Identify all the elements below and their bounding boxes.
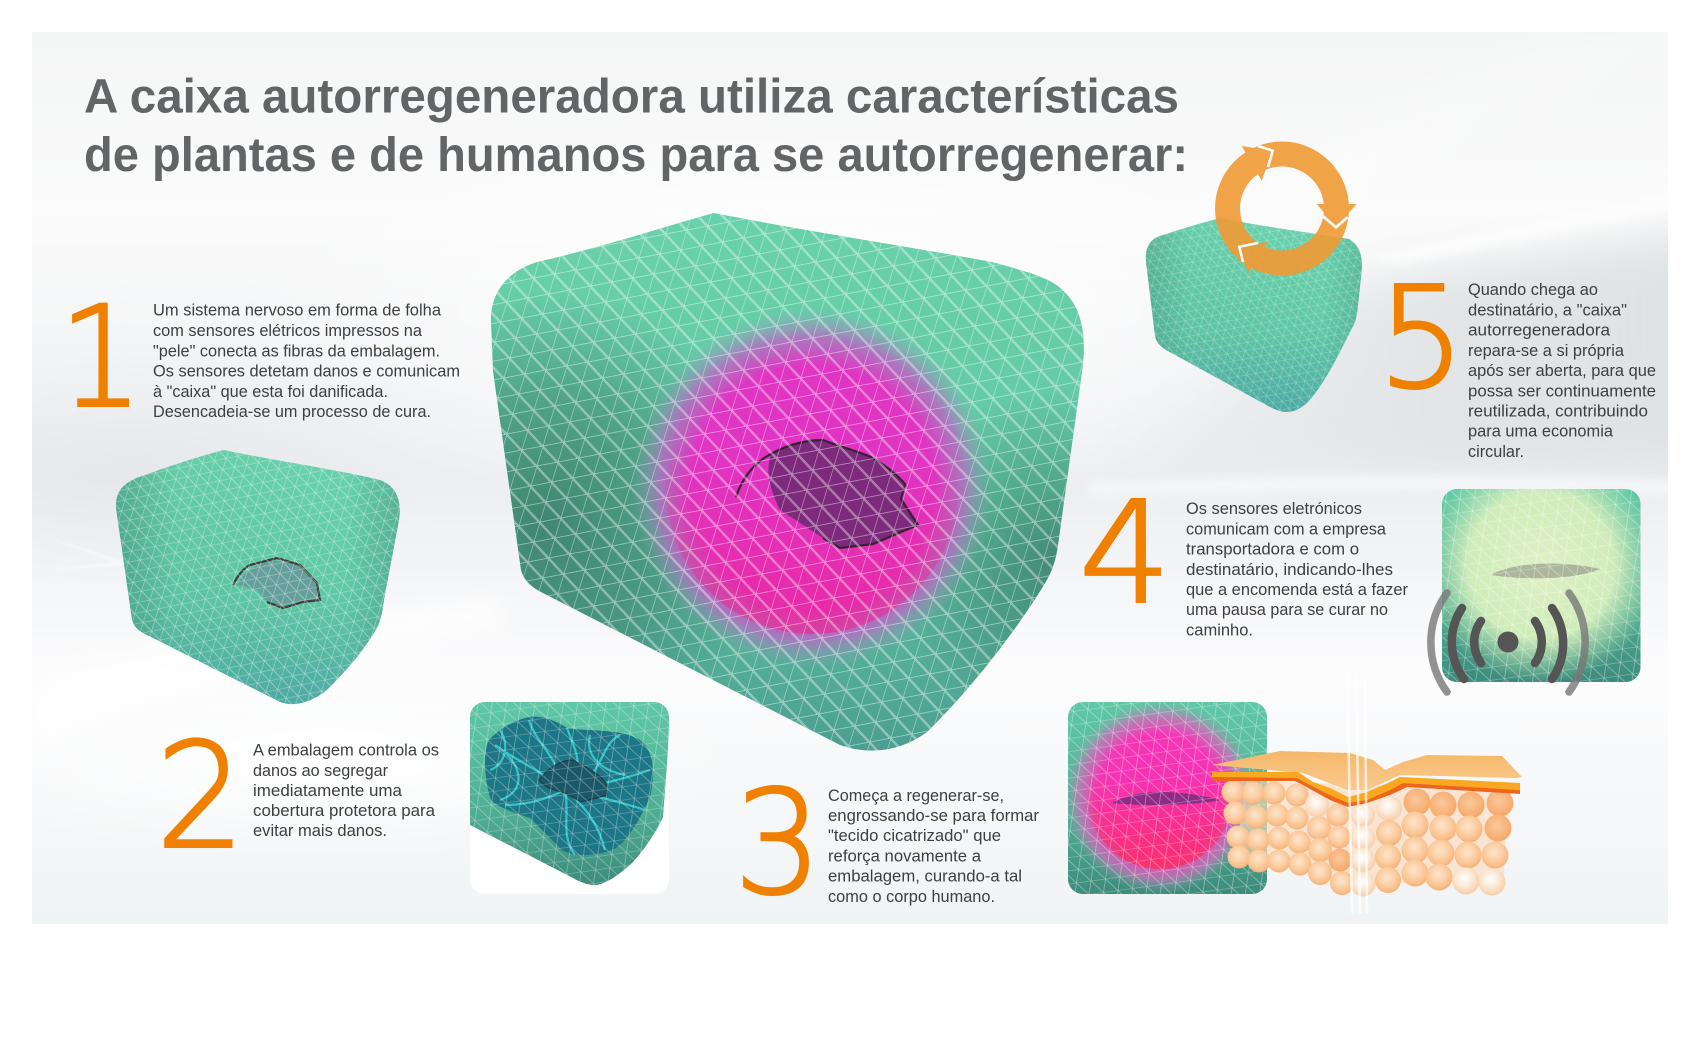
step 3 text: "tecido cicatrizado" que bbox=[828, 826, 1001, 845]
step 1 text bbox=[153, 301, 460, 421]
title bbox=[84, 70, 1188, 182]
step 5 text bbox=[1468, 280, 1656, 461]
step 2 number: 2 bbox=[156, 712, 245, 882]
scar slit bbox=[1112, 792, 1222, 805]
pink healing zone bbox=[632, 308, 992, 668]
step 5 text: circular. bbox=[1468, 442, 1524, 461]
damage hole bbox=[736, 440, 918, 548]
illustration: healed small box bbox=[1140, 215, 1370, 415]
step 2 text: cobertura protetora para bbox=[253, 801, 436, 820]
step 3 text: engrossando-se para formar bbox=[828, 806, 1039, 825]
step 1 text: Um sistema nervoso em forma de folha bbox=[153, 301, 442, 320]
step 5 text: após ser aberta, para que bbox=[1468, 361, 1656, 380]
title: de plantas e de humanos para se autorregenerar: bbox=[84, 129, 1188, 182]
step 4 text: destinatário, indicando-lhes bbox=[1186, 560, 1393, 579]
thumbnail: protective coating bbox=[470, 702, 669, 894]
step 3 text: como o corpo humano. bbox=[828, 887, 995, 906]
step 4 text: transportadora e com o bbox=[1186, 540, 1359, 558]
thumbnail: scar tissue forming bbox=[1064, 701, 1267, 894]
top skin sheet bbox=[1212, 751, 1522, 790]
step 4 text: uma pausa para se curar no bbox=[1186, 600, 1388, 619]
step 1 text: com sensores elétricos impressos na bbox=[153, 321, 423, 340]
step 1 text: à "caixa" que esta foi danificada. bbox=[153, 382, 388, 401]
hole bbox=[233, 558, 320, 608]
step 5 number: 5 bbox=[1378, 258, 1465, 420]
step 4 text: comunicam com a empresa bbox=[1186, 520, 1387, 538]
nerve fibres bbox=[1347, 670, 1367, 913]
illustration: small box with hole bbox=[110, 445, 405, 710]
icon: wireless signal bbox=[1431, 593, 1585, 692]
skin cells bbox=[1222, 780, 1514, 896]
step 1 text: Os sensores detetam danos e comunicam bbox=[153, 362, 460, 381]
step 1 text: "pele" conecta as fibras da embalagem. bbox=[153, 341, 440, 360]
step 5 text: reutilizada, contribuindo bbox=[1468, 402, 1648, 420]
step 3 text: embalagem, curando-a tal bbox=[828, 866, 1022, 886]
thumbnail: healed slit with sensor bbox=[1442, 489, 1640, 682]
icon: circular economy arrows bbox=[1228, 146, 1357, 273]
step 4 text bbox=[1186, 499, 1408, 640]
illustration: large damaged box with pink healing zone bbox=[480, 205, 1100, 760]
step 1 text: Desencadeia-se um processo de cura. bbox=[153, 402, 431, 421]
step 3 text: reforça novamente a bbox=[828, 846, 982, 866]
step 5 text: repara-se a si própria bbox=[1468, 341, 1625, 360]
step 5 text: Quando chega ao bbox=[1468, 280, 1598, 299]
step 3 text bbox=[828, 786, 1039, 906]
teal secretion blob bbox=[485, 717, 653, 855]
illustration: skin cross-section bbox=[1212, 670, 1522, 913]
step 2 text: evitar mais danos. bbox=[253, 821, 387, 840]
step 2 text: A embalagem controla os bbox=[253, 741, 439, 760]
title: A caixa autorregeneradora utiliza características bbox=[84, 70, 1179, 124]
step 4 text: que a encomenda está a fazer bbox=[1186, 580, 1408, 599]
step 3 text: Começa a regenerar-se, bbox=[828, 786, 1004, 805]
step 1 number: 1 bbox=[59, 276, 143, 438]
step 2 text: danos ao segregar bbox=[253, 761, 388, 780]
step 4 text: caminho. bbox=[1186, 620, 1253, 640]
step 5 text: possa ser continuamente bbox=[1468, 382, 1656, 400]
scar tissue band bbox=[1212, 772, 1520, 803]
step 2 text bbox=[253, 741, 439, 840]
step 5 text: destinatário, a "caixa" bbox=[1468, 300, 1627, 320]
step 3 number: 3 bbox=[734, 760, 822, 926]
step 5 text: autorregeneradora bbox=[1468, 320, 1611, 340]
step 4 text: Os sensores eletrónicos bbox=[1186, 499, 1362, 518]
step 4 number: 4 bbox=[1079, 472, 1171, 636]
step 2 text: imediatamente uma bbox=[253, 781, 403, 800]
step 5 text: para uma economia bbox=[1468, 422, 1614, 440]
